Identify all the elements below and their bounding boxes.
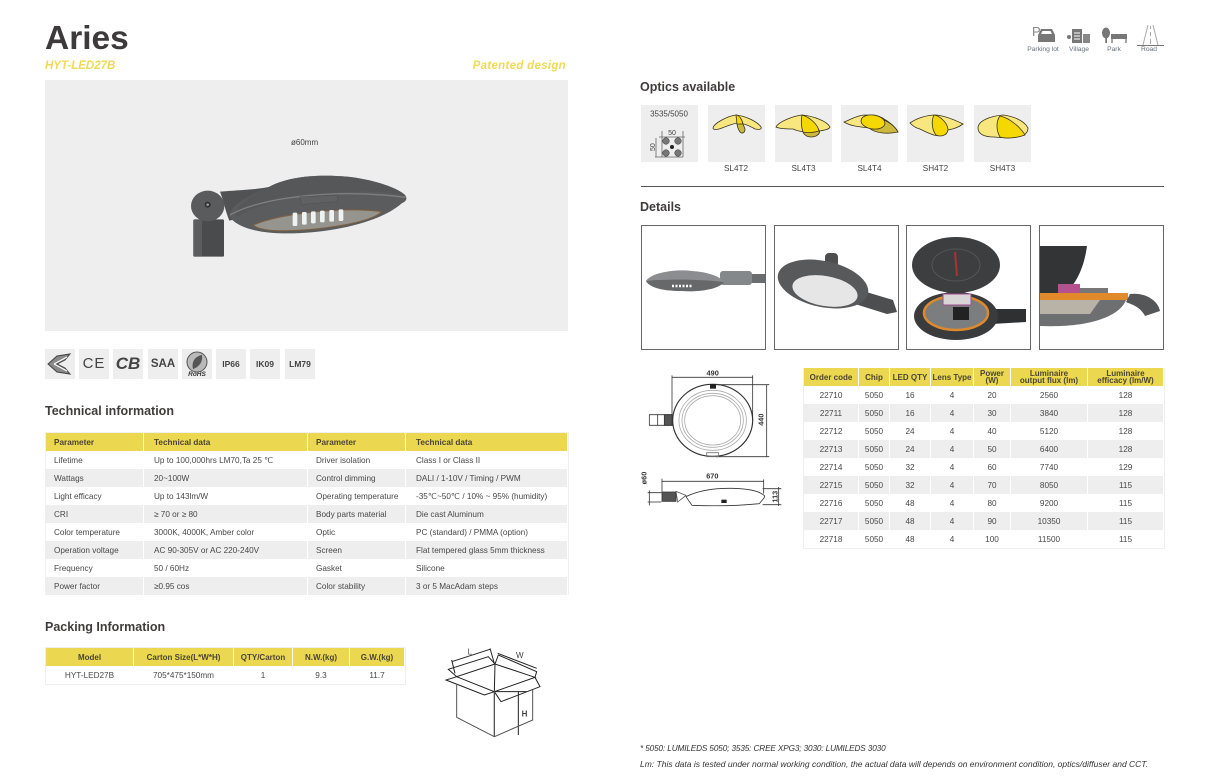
module diagram: 50 — [650, 143, 657, 151]
technical information table: ≥0.95 cos — [154, 582, 189, 590]
badge: RoHS: RoHS — [188, 371, 207, 378]
order code table: 22714 — [820, 462, 842, 472]
order code table: 4 — [950, 408, 954, 418]
icon: village — [1067, 29, 1090, 43]
packing information table: Carton Size(L*W*H) — [147, 652, 220, 662]
title: Aries — [45, 20, 129, 57]
heading: technical information: Technical information — [45, 404, 174, 418]
order code table: 48 — [905, 534, 915, 544]
packing information table — [45, 647, 406, 685]
badge: SAA — [148, 349, 178, 379]
dimension drawing: top and side view — [640, 368, 782, 506]
packing information table: 705*475*150mm — [153, 670, 214, 680]
order code table: 11500 — [1038, 534, 1060, 544]
badge: CE: CE — [83, 355, 105, 372]
order code table: 7740 — [1040, 462, 1058, 472]
order code table: 100 — [985, 534, 999, 544]
order code table: 22717 — [820, 516, 842, 526]
order code table: 128 — [1119, 426, 1132, 436]
LED module tile — [641, 105, 698, 162]
technical information table: Operating temperature — [316, 492, 398, 500]
technical information table: Color stability — [316, 582, 365, 590]
order code table: 5120 — [1040, 426, 1058, 436]
heading: optics available: Optics available — [640, 80, 735, 94]
technical information table: Frequency — [54, 564, 93, 572]
badge: CE — [79, 349, 109, 379]
packing information table: 1 — [261, 670, 265, 680]
technical information table: Wattags — [54, 474, 84, 482]
badge: IP66 — [216, 349, 246, 379]
technical information table: Operation voltage — [54, 546, 119, 554]
order code table: 4 — [950, 426, 954, 436]
order code table: 5050 — [865, 408, 883, 418]
dimension drawing: top and side view: 113 — [770, 491, 779, 503]
order code table: 8050 — [1040, 480, 1058, 490]
optic tile: SH4T2 — [907, 105, 964, 162]
technical information table: 20~100W — [154, 474, 189, 482]
packing information table: 11.7 — [369, 670, 385, 680]
order code table: 60 — [987, 462, 997, 472]
label: park: Park — [1107, 46, 1121, 53]
detail photo: side view — [640, 225, 766, 350]
order code table: Luminaire — [1030, 368, 1068, 378]
detail photo: close-up — [1039, 225, 1164, 350]
order code table — [803, 368, 1165, 549]
technical information table: CRI — [54, 510, 68, 518]
technical information table — [45, 432, 569, 595]
order code table: 5050 — [865, 444, 883, 454]
order code table: 2560 — [1040, 390, 1058, 400]
patented design note: Patented design — [473, 60, 566, 72]
technical information table: DALI / 1-10V / Timing / PWM — [416, 474, 521, 482]
order code table: 9200 — [1040, 498, 1058, 508]
technical information table: Technical data — [416, 438, 472, 446]
optic tile: SL4T3 — [775, 105, 832, 162]
technical information table: Power factor — [54, 582, 100, 590]
packing information table: Model — [78, 652, 101, 662]
badge: SAA: SAA — [151, 358, 175, 370]
order code table: (W) — [986, 376, 998, 385]
order code table: 4 — [950, 390, 954, 400]
technical information table: 50 / 60Hz — [154, 564, 189, 572]
technical information table: Control dimming — [316, 474, 376, 482]
icon: road — [1137, 24, 1164, 46]
order code table: 129 — [1119, 462, 1132, 472]
order code table: 24 — [905, 426, 915, 436]
badge: CB — [113, 349, 143, 379]
order code table: 22715 — [820, 480, 842, 490]
order code table: 40 — [987, 426, 997, 436]
order code table: Chip — [865, 372, 883, 382]
technical information table: Up to 100,000hrs LM70,Ta 25 ℃ — [154, 456, 273, 464]
technical information table: Lifetime — [54, 456, 83, 464]
order code table: 48 — [905, 498, 915, 508]
order code table: 4 — [950, 444, 954, 454]
icon: parking lot — [1032, 24, 1055, 42]
optic tile: SL4T2 — [708, 105, 764, 162]
order code table: 16 — [905, 408, 915, 418]
order code table: 50 — [987, 444, 997, 454]
label: road: Road — [1141, 46, 1157, 53]
carton box diagram — [444, 648, 541, 738]
module diagram — [650, 110, 688, 158]
model number: HYT-LED27B — [45, 60, 115, 72]
order code table: 22713 — [820, 444, 842, 454]
heading: details: Details — [640, 200, 681, 214]
order code table: Order code — [810, 372, 852, 382]
packing information table: QTY/Carton — [241, 652, 285, 662]
packing information table: G.W.(kg) — [361, 652, 393, 662]
certification badges — [45, 349, 315, 379]
order code table: 4 — [950, 480, 954, 490]
packing information table: 9.3 — [315, 670, 327, 680]
footnote: lumen data: Lm: This data is tested under normal working condition, the actual data will depends on environment condition, optics/diffuser and CCT. — [640, 759, 1148, 769]
technical information table: Parameter — [316, 438, 356, 446]
packing information table: HYT-LED27B — [65, 670, 114, 680]
order code table: 10350 — [1038, 516, 1060, 526]
order code table: 22710 — [820, 390, 842, 400]
product lamp illustration — [191, 176, 406, 257]
order code table: 16 — [905, 390, 915, 400]
order code table: efficacy (lm/W) — [1097, 376, 1154, 385]
order code table: 4 — [950, 462, 954, 472]
technical information table: Die cast Aluminum — [416, 510, 484, 518]
icon: park — [1102, 28, 1127, 43]
technical information table: ≥ 70 or ≥ 80 — [154, 510, 198, 518]
order code table: 5050 — [865, 480, 883, 490]
order code table: 115 — [1119, 516, 1132, 526]
optic tile: SL4T4 — [841, 105, 898, 162]
order code table: 5050 — [865, 534, 883, 544]
badge: LM79: LM79 — [289, 359, 311, 369]
technical information table: Gasket — [316, 564, 342, 572]
carton box diagram: H — [522, 709, 528, 718]
order code table: 128 — [1119, 408, 1132, 418]
order code table: 22711 — [820, 408, 842, 418]
label: village: Village — [1069, 46, 1089, 53]
order code table: 20 — [987, 390, 997, 400]
badge: ENEC — [45, 349, 75, 379]
carton box diagram: L — [468, 648, 473, 657]
badge: IP66: IP66 — [222, 359, 240, 369]
module diagram: 50 — [668, 130, 676, 137]
technical information table: 3 or 5 MacAdam steps — [416, 582, 498, 590]
label: SH4T2: SH4T2 — [923, 164, 948, 173]
order code table: 115 — [1119, 498, 1132, 508]
order code table: 5050 — [865, 498, 883, 508]
order code table: 6400 — [1040, 444, 1058, 454]
technical information table: PC (standard) / PMMA (option) — [416, 528, 528, 536]
technical information table: Color temperature — [54, 528, 120, 536]
badge: CB: CB — [116, 354, 140, 373]
order code table: 5050 — [865, 426, 883, 436]
optic tile: SH4T3 — [974, 105, 1031, 162]
order code table: 5050 — [865, 390, 883, 400]
order code table: 22712 — [820, 426, 842, 436]
order code table: 32 — [905, 462, 915, 472]
order code table: 115 — [1119, 534, 1132, 544]
order code table: Luminaire — [1106, 368, 1145, 378]
detail photo: open housing — [906, 225, 1031, 350]
technical information table: Light efficacy — [54, 492, 102, 500]
badge: IK09 — [250, 349, 280, 379]
technical information table: Body parts material — [316, 510, 387, 518]
technical information table: 3000K, 4000K, Amber color — [154, 528, 254, 536]
order code table: 4 — [950, 534, 954, 544]
dimension drawing: top and side view: 490 — [707, 368, 719, 377]
order code table: 4 — [950, 516, 954, 526]
panel: product photo — [45, 80, 568, 331]
order code table: 48 — [905, 516, 915, 526]
order code table: 30 — [987, 408, 997, 418]
order code table: 22716 — [820, 498, 842, 508]
carton box diagram: W — [516, 651, 524, 660]
label: SH4T3: SH4T3 — [990, 164, 1015, 173]
badge: RoHS — [182, 349, 212, 379]
technical information table: Driver isolation — [316, 456, 370, 464]
footnote: LED sources: * 5050: LUMILEDS 5050; 3535: CREE XPG3; 3030: LUMILEDS 3030 — [640, 744, 886, 753]
technical information table: Parameter — [54, 438, 94, 446]
technical information table: Optic — [316, 528, 335, 536]
technical information table: -35℃~50℃ / 10% ~ 95% (humidity) — [416, 492, 547, 500]
application icons — [1027, 24, 1164, 53]
order code table: 22718 — [820, 534, 842, 544]
dimension drawing: top and side view: 440 — [757, 414, 766, 426]
label: SL4T4: SL4T4 — [857, 164, 882, 173]
order code table: 32 — [905, 480, 915, 490]
module diagram: 3535/5050 — [650, 110, 688, 118]
order code table: LED QTY — [893, 372, 927, 382]
order code table: 24 — [905, 444, 915, 454]
order code table: 128 — [1119, 390, 1132, 400]
technical information table: Class I or Class II — [416, 456, 480, 464]
order code table: Lens Type — [932, 372, 971, 382]
label: parking lot: Parking lot — [1027, 46, 1059, 53]
technical information table: AC 90-305V or AC 220-240V — [154, 546, 259, 554]
order code table: 5050 — [865, 516, 883, 526]
order code table: 80 — [987, 498, 997, 508]
technical information table: Flat tempered glass 5mm thickness — [416, 546, 545, 554]
technical information table: Silicone — [416, 564, 445, 572]
order code table: 3840 — [1040, 408, 1058, 418]
detail photo: underside view — [774, 225, 898, 350]
pole diameter label: ø60mm — [291, 138, 318, 147]
badge: IK09: IK09 — [256, 359, 274, 369]
label: SL4T2: SL4T2 — [724, 164, 748, 173]
order code table: output flux (lm) — [1020, 376, 1078, 385]
heading: packing information: Packing Information — [45, 620, 165, 634]
badge: LM79 — [285, 349, 315, 379]
packing information table: N.W.(kg) — [305, 652, 337, 662]
technical information table: Screen — [316, 546, 342, 554]
label: SL4T3: SL4T3 — [791, 164, 816, 173]
order code table: 70 — [987, 480, 997, 490]
order code table: Power — [980, 368, 1004, 378]
order code table: 115 — [1119, 480, 1132, 490]
dimension drawing: top and side view: 670 — [706, 472, 718, 481]
order code table: 128 — [1119, 444, 1132, 454]
technical information table: Up to 143lm/W — [154, 492, 208, 500]
order code table: 90 — [987, 516, 997, 526]
dimension drawing: top and side view: ø60 — [640, 472, 649, 484]
order code table: 4 — [950, 498, 954, 508]
icon: parking lot: P — [1032, 24, 1041, 39]
technical information table: Technical data — [154, 438, 210, 446]
order code table: 5050 — [865, 462, 883, 472]
